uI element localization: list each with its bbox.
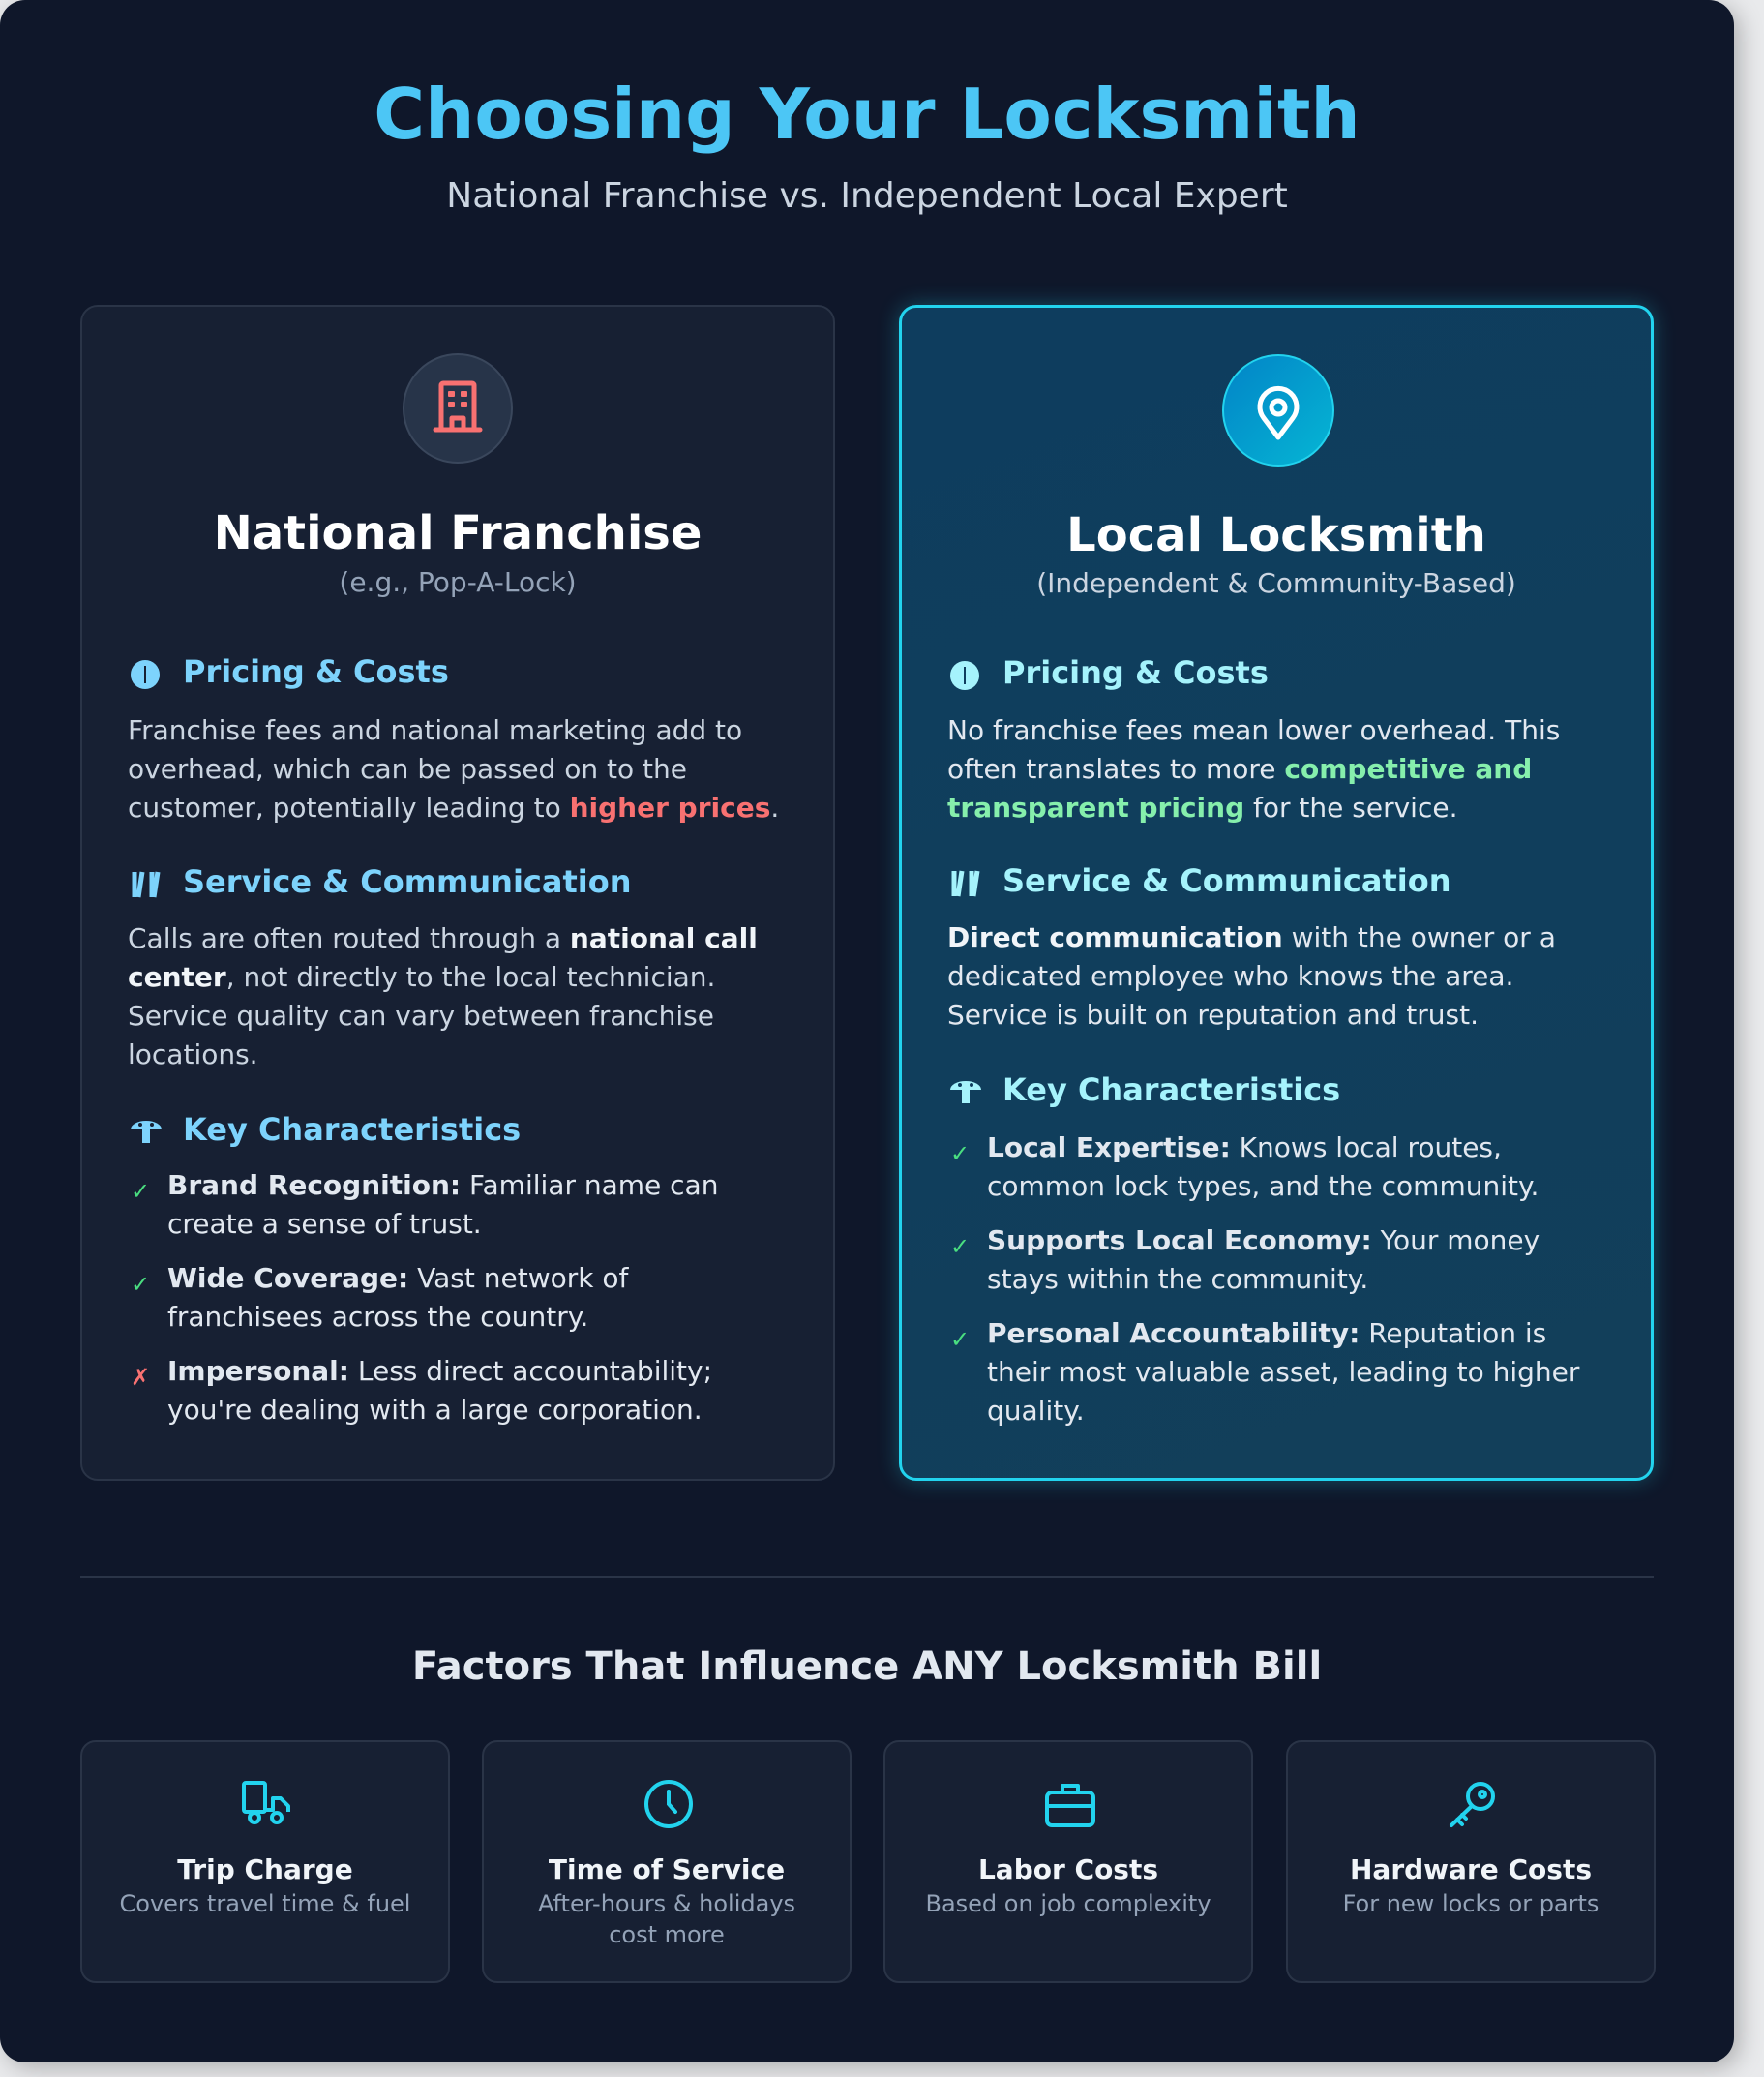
list item: impersonal: ✗ xyxy=(131,1364,150,1391)
list item: accountability: Personal Accountability: Reputation is their most valuable asset, leading to higher quality. xyxy=(987,1317,1579,1427)
pricing text: No franchise fees mean lower overhead. This often translates to more competitive and transparent pricing for the service. xyxy=(947,714,1560,824)
factor: hardware xyxy=(1286,1740,1656,1983)
list item: local expertise: ✓ xyxy=(950,1140,970,1167)
factor: hardware: For new locks or parts xyxy=(1343,1890,1599,1917)
service text: Direct communication with the owner or a dedicated employee who knows the area. Service is built on reputation and trust. xyxy=(947,921,1556,1031)
icon: building xyxy=(403,353,513,464)
panel: national franchise xyxy=(80,305,835,1481)
panel: local locksmith xyxy=(899,305,1654,1481)
icon: key xyxy=(1450,1782,1495,1827)
list item: local economy: ✓ xyxy=(950,1233,970,1260)
factor: labor: Labor Costs xyxy=(978,1853,1158,1885)
list item: brand recognition: Brand Recognition: Familiar name can create a sense of trust. xyxy=(167,1169,718,1240)
subheading: (e.g., Pop-A-Lock) xyxy=(339,566,577,598)
section: pricing heading: Pricing & Costs xyxy=(1002,654,1269,691)
factor: trip charge: Trip Charge xyxy=(177,1853,353,1885)
factor: hardware: Hardware Costs xyxy=(1350,1853,1592,1885)
list item: local economy: Supports Local Economy: Your money stays within the community. xyxy=(987,1224,1540,1295)
factor: trip charge: Covers travel time & fuel xyxy=(120,1890,410,1917)
icon: clock xyxy=(644,1780,693,1828)
pricing text: Franchise fees and national marketing add to overhead, which can be passed on to the customer, potentially leading to higher prices. xyxy=(128,714,779,824)
heading: Local Locksmith xyxy=(1066,508,1486,562)
section: key characteristics heading: Key Characteristics xyxy=(1002,1071,1340,1108)
title: Choosing Your Locksmith xyxy=(374,74,1360,155)
section: key characteristics heading: Key Characteristics xyxy=(183,1111,521,1148)
service text: Calls are often routed through a national call center, not directly to the local technician. Service quality can vary between franchise locations. xyxy=(128,922,758,1070)
factor: labor xyxy=(883,1740,1253,1983)
factors heading: Factors That Influence ANY Locksmith Bill xyxy=(412,1644,1322,1689)
list item: accountability: ✓ xyxy=(950,1326,970,1353)
list item: local expertise: Local Expertise: Knows local routes, common lock types, and the community. xyxy=(987,1131,1539,1202)
factor: time of service: cost more xyxy=(609,1921,725,1948)
section: service heading: Service & Communication xyxy=(183,863,631,900)
icon: truck xyxy=(242,1781,290,1824)
icon: briefcase xyxy=(1045,1784,1095,1827)
subtitle: National Franchise vs. Independent Local Expert xyxy=(446,176,1288,216)
list item: wide coverage: Wide Coverage: Vast network of franchisees across the country. xyxy=(167,1262,628,1333)
list item: wide coverage: ✓ xyxy=(131,1271,150,1298)
subheading: (Independent & Community-Based) xyxy=(1036,567,1516,599)
icon: map pin xyxy=(1222,354,1334,467)
factor: time of service: Time of Service xyxy=(549,1853,785,1885)
heading: National Franchise xyxy=(214,506,702,560)
list item: brand recognition: ✓ xyxy=(131,1178,150,1205)
factor: time of service: After-hours & holidays xyxy=(538,1890,795,1917)
list item: impersonal: Impersonal: Less direct accountability; you're dealing with a large corporation. xyxy=(167,1355,712,1426)
factor: trip charge xyxy=(80,1740,450,1983)
section: service heading: Service & Communication xyxy=(1002,862,1451,899)
factor: time of service xyxy=(482,1740,852,1983)
section: pricing heading: Pricing & Costs xyxy=(183,653,449,690)
factor: labor: Based on job complexity xyxy=(925,1890,1211,1917)
